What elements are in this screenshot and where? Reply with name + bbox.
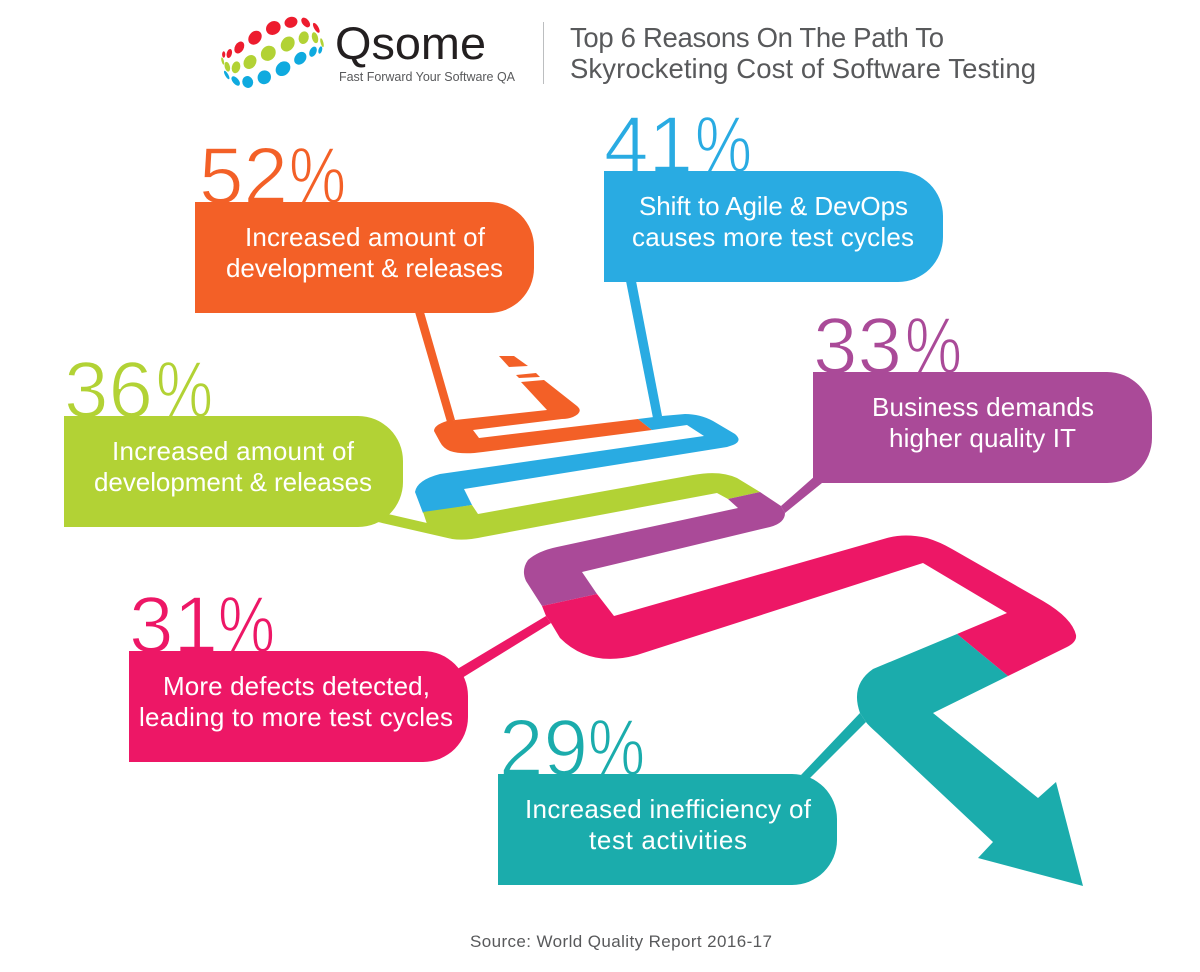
box <box>498 774 837 885</box>
ribbon segment: blue <box>415 414 739 513</box>
percentage: 52 <box>199 131 288 220</box>
callout: 29% <box>498 703 866 885</box>
connector <box>781 476 822 513</box>
percentage: 36 <box>64 345 153 434</box>
percentage: % <box>695 100 752 189</box>
title: Skyrocketing Cost of Software Testing <box>570 53 1036 84</box>
connector <box>626 281 662 418</box>
box <box>813 372 1152 483</box>
callout: 52% <box>195 131 534 422</box>
ribbon segment: green <box>423 473 760 540</box>
ribbon segment: orange <box>434 356 652 453</box>
label: higher quality IT <box>889 423 1076 453</box>
box <box>64 416 403 527</box>
title <box>570 22 1036 84</box>
label: Business demands <box>872 392 1094 422</box>
connector <box>454 616 551 678</box>
percentage: % <box>588 703 645 792</box>
percentage: % <box>289 131 346 220</box>
percentage: % <box>905 301 962 390</box>
percentage: 29 <box>499 703 588 792</box>
callout: 33% <box>781 301 1152 513</box>
label: More defects detected, <box>163 671 430 701</box>
percentage: % <box>156 345 213 434</box>
percentage <box>499 703 645 792</box>
percentage: 33 <box>813 301 902 390</box>
logo: Qsome <box>221 15 516 89</box>
percentage <box>813 301 962 390</box>
percentage: 31 <box>129 580 218 669</box>
label: Increased amount of <box>245 222 486 252</box>
percentage <box>604 100 752 189</box>
label: Increased inefficiency of <box>525 794 812 824</box>
ribbon segment: teal arrow <box>857 634 1083 886</box>
label <box>226 222 503 283</box>
label: causes more test cycles <box>632 222 914 252</box>
ribbon segment: pink <box>542 536 1076 676</box>
label: Increased amount of <box>112 436 355 466</box>
label: Shift to Agile & DevOps <box>639 191 908 221</box>
label <box>872 392 1094 453</box>
connector <box>378 514 452 539</box>
callout: 41% <box>604 100 943 418</box>
label: leading to more test cycles <box>139 702 453 732</box>
title: Top 6 Reasons On The Path To <box>570 22 944 53</box>
callout: 36% <box>64 345 452 539</box>
percentage: 41 <box>604 100 693 189</box>
label <box>139 671 453 732</box>
percentage <box>199 131 346 220</box>
connector <box>801 713 866 778</box>
connector <box>415 312 455 422</box>
percentage <box>129 580 275 669</box>
callout: 31% <box>129 580 551 762</box>
box <box>129 651 468 762</box>
label <box>632 191 914 252</box>
label: development & releases <box>94 467 372 497</box>
header divider <box>543 22 544 84</box>
source note: Source: World Quality Report 2016-17 <box>470 932 772 951</box>
box <box>195 202 534 313</box>
box <box>604 171 943 282</box>
label: test activities <box>589 825 747 855</box>
ribbon segment: purple <box>524 492 785 606</box>
ribbon arrow path <box>415 356 1083 886</box>
logo wordmark: Qsome <box>335 18 486 69</box>
label <box>94 436 372 497</box>
percentage <box>64 345 213 434</box>
label: development & releases <box>226 253 503 283</box>
icon: dotted globe <box>221 15 325 89</box>
logo tagline: Fast Forward Your Software QA <box>339 70 516 84</box>
label <box>525 794 812 855</box>
percentage: % <box>218 580 275 669</box>
